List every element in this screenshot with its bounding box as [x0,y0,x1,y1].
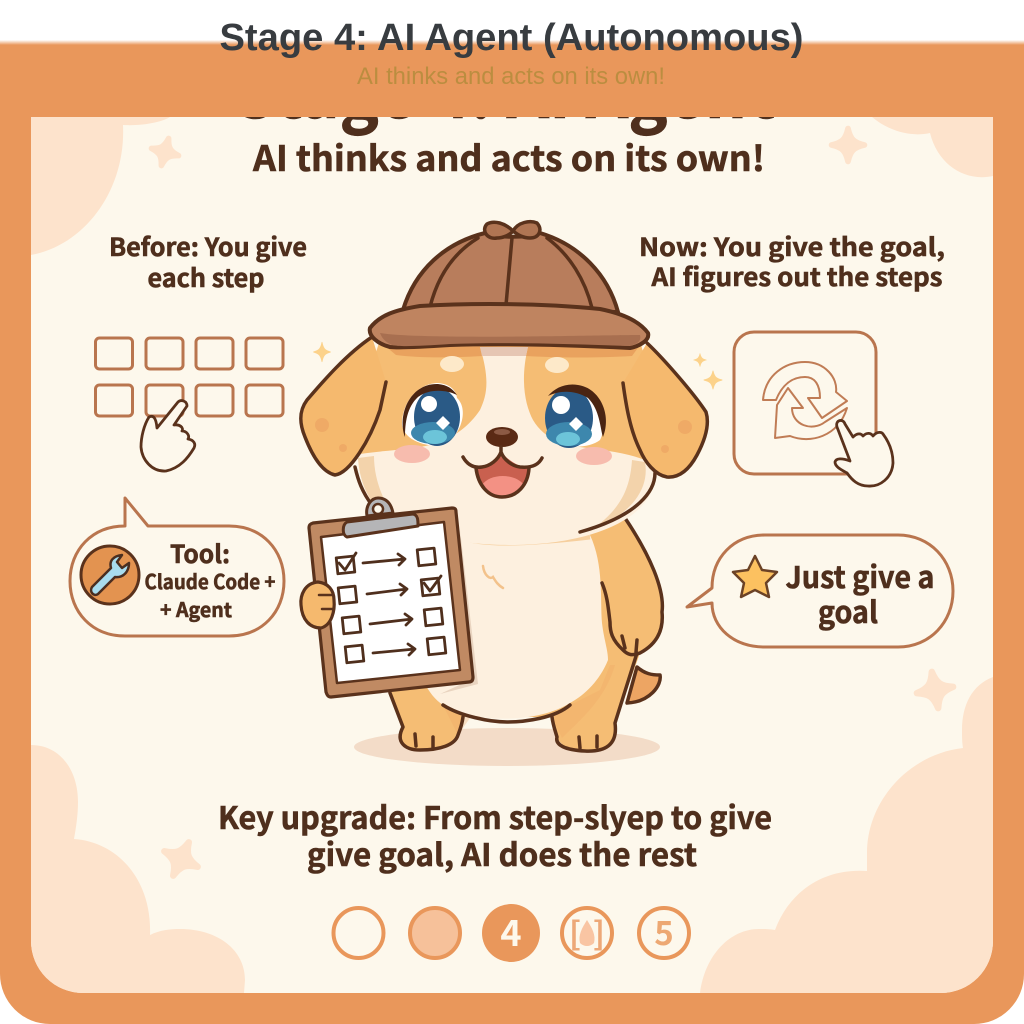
head [355,340,660,545]
icon: pointing hand right [835,420,893,486]
tool label: Claude Code + [144,566,276,595]
refresh arrows [763,362,847,439]
text: now [639,228,945,294]
progress indicator [334,904,689,962]
heading: AI thinks and acts: AI thinks and acts on its own! [252,131,765,182]
goal label: Just give a [786,553,934,597]
callout: just give a goal [687,535,953,647]
callout: tool [70,498,284,636]
icon: goal square with refresh [734,332,893,486]
clip [343,498,418,537]
progress indicator: 4 [500,905,522,957]
ground shadow [354,728,660,766]
text: before: Before: You give [109,228,307,264]
goal label [786,553,934,632]
text: now: AI figures out the steps [650,258,942,294]
checklist [336,548,446,663]
text: now: Now: You give the goal, [639,228,945,264]
character: puppy [301,222,707,766]
cream panel with clouds and stars: Stage 4: AI Agent [235,34,775,139]
icon: wrench [81,546,139,604]
subtitle in band: AI thinks and acts on its own! [357,63,665,90]
key upgrade text: Key upgrade: From step-slyep to give [218,793,772,838]
tool label: Tool: [170,535,230,571]
top band [31,45,993,117]
tool label: + Agent [160,594,233,623]
title: Stage 4: AI Agent (Autonomous) [220,17,804,59]
clipboard [301,498,478,697]
sparkles [314,342,722,389]
progress indicator: 5 [654,907,674,955]
paw holding clipboard [301,582,334,628]
ears [301,337,707,477]
text: before: each step [148,259,264,295]
key upgrade text [218,793,772,875]
key upgrade text: give goal, AI does the rest [307,830,697,875]
icon: star [733,556,777,597]
icon: pointing hand left [141,401,195,471]
nose and mouth [463,427,542,497]
goal label: goal [818,588,878,632]
tool label [144,535,276,623]
text: before [109,228,307,295]
body and legs [385,518,662,751]
tail [627,667,660,703]
step boxes grid [96,338,283,416]
blush [394,445,612,465]
progress indicator: [ ] [569,909,605,955]
hat [370,222,648,348]
eyes [402,383,606,448]
